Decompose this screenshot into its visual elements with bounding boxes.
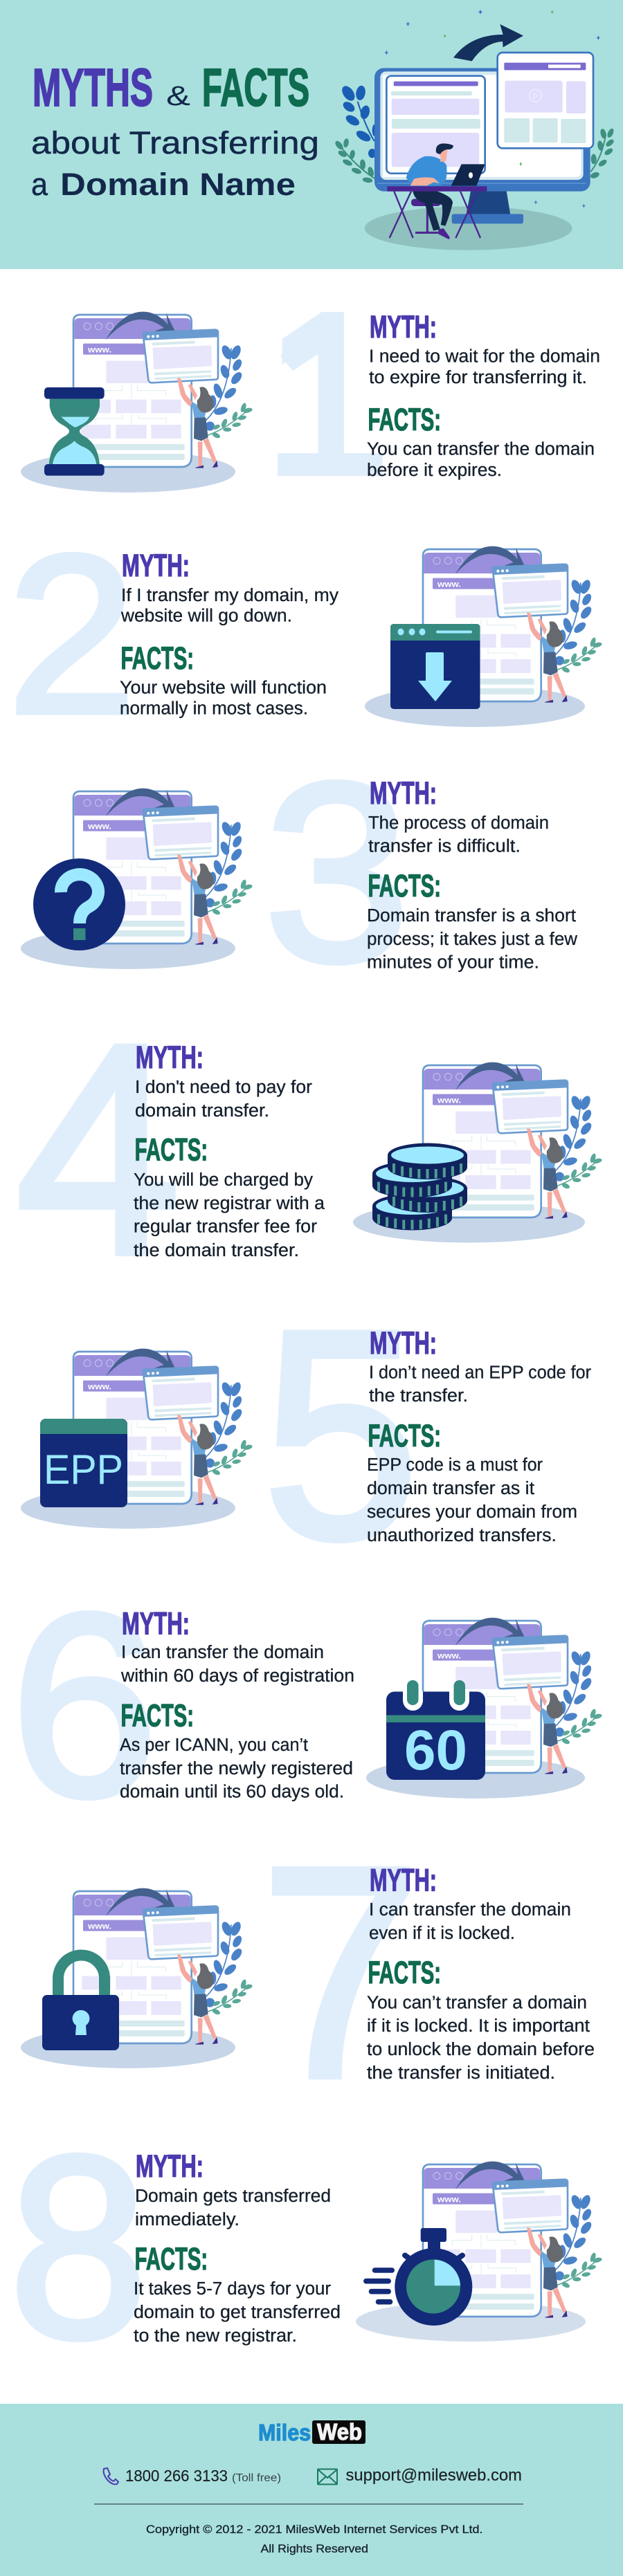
- myth text: the transfer.: [369, 1386, 468, 1406]
- panel: myth 7: [21, 1805, 595, 2140]
- illustration: browser transfer with EPP card: [21, 1349, 253, 1529]
- myth text: MYTH:: [136, 1040, 204, 1075]
- big number 2: 2: [7, 508, 136, 761]
- panel: myth 6: [10, 1560, 602, 1850]
- big number 8: 8: [9, 2101, 147, 2392]
- myth text: I don't need to pay for: [135, 1078, 313, 1097]
- illustration: browser transfer with calendar: www.: [437, 1652, 461, 1660]
- facts text: FACTS:: [368, 402, 441, 437]
- facts text: unauthorized transfers.: [367, 1526, 557, 1545]
- title: MYTHS: [33, 58, 153, 118]
- big number 3: 3: [264, 730, 410, 1015]
- myth text: MYTH:: [370, 775, 437, 811]
- myth text: [135, 1040, 313, 1121]
- illustration: browser transfer with download window: www.: [437, 581, 461, 589]
- facts text: to the new registrar.: [134, 2326, 297, 2346]
- facts text: transfer the newly registered: [120, 1759, 353, 1778]
- facts text: secures your domain from: [367, 1502, 577, 1522]
- panel: myth 3: [21, 730, 578, 1015]
- myth text: [369, 1862, 571, 1943]
- facts text: EPP code is a must for: [367, 1455, 543, 1475]
- myth text: [135, 2149, 331, 2229]
- header banner: [0, 0, 623, 269]
- illustration: browser transfer with download window: [365, 546, 602, 727]
- facts text: minutes of your time.: [367, 953, 539, 973]
- copyright: Copyright © 2012 - 2021 MilesWeb Internet Services Pvt Ltd.: [146, 2523, 483, 2536]
- illustration: browser transfer with padlock: [21, 1888, 253, 2068]
- facts text: As per ICANN, you can’t: [120, 1736, 308, 1755]
- myth text: I can transfer the domain: [369, 1900, 571, 1920]
- facts text: You can transfer the domain: [367, 440, 595, 459]
- panel: myth 1: [21, 265, 600, 522]
- illustration: browser transfer with EPP card: www.: [87, 1383, 111, 1392]
- title: a: [31, 167, 48, 202]
- illustration: browser transfer with stopwatch: www.: [437, 2196, 461, 2204]
- logo: MilesWeb: Miles: [258, 2420, 311, 2445]
- myth text: domain transfer.: [135, 1101, 269, 1121]
- phone number: [125, 2467, 281, 2485]
- facts text: FACTS:: [368, 1418, 441, 1453]
- panel: myth 4: [16, 983, 602, 1316]
- copyright: [146, 2523, 483, 2555]
- illustration: browser transfer with hourglass: www.: [87, 346, 111, 354]
- big number 6: 6: [10, 1560, 159, 1850]
- facts text: [120, 641, 327, 718]
- copyright: All Rights Reserved: [260, 2543, 368, 2555]
- icon: email: [318, 2469, 337, 2485]
- facts text: normally in most cases.: [120, 699, 308, 718]
- myth text: I don’t need an EPP code for: [369, 1363, 591, 1382]
- illustration: browser transfer with EPP card: EPP: [44, 1446, 123, 1493]
- title: [31, 58, 319, 202]
- logo: MilesWeb: [258, 2419, 365, 2445]
- logo: MilesWeb: Web: [317, 2419, 362, 2445]
- facts text: the domain transfer.: [134, 1241, 299, 1260]
- icon: phone: [104, 2468, 118, 2484]
- facts text: before it expires.: [367, 461, 502, 480]
- title: about Transferring: [31, 125, 319, 160]
- panel: myth 5: [21, 1270, 591, 1600]
- facts text: domain transfer as it: [367, 1479, 534, 1498]
- facts text: You can’t transfer a domain: [367, 1994, 587, 2013]
- facts text: to unlock the domain before: [367, 2040, 595, 2059]
- panel: myth 8: [9, 2101, 602, 2392]
- illustration: browser transfer with coins: www.: [437, 1097, 461, 1105]
- illustration: browser transfer with hourglass: [21, 312, 253, 493]
- big number 7: 7: [260, 1805, 421, 2140]
- illustration: browser transfer with question mark: www.: [87, 823, 111, 831]
- myth text: The process of domain: [368, 813, 549, 833]
- big number 4: 4: [16, 983, 181, 1316]
- big number 1: 1: [263, 265, 391, 522]
- phone number: 1800 266 3133: [125, 2467, 228, 2485]
- facts text: FACTS:: [120, 1698, 194, 1733]
- facts text: FACTS:: [368, 1955, 441, 1990]
- myth text: [120, 1606, 354, 1686]
- illustration: browser transfer with stopwatch: [356, 2162, 602, 2342]
- person at desk: [387, 143, 487, 239]
- myth text: [120, 548, 338, 625]
- myth text: MYTH:: [122, 1606, 190, 1641]
- myth text: MYTH:: [370, 1325, 437, 1361]
- facts text: [367, 402, 595, 480]
- facts text: FACTS:: [135, 1132, 208, 1168]
- email address: support@milesweb.com: [346, 2466, 522, 2485]
- title: Domain Name: [60, 167, 296, 202]
- myth text: within 60 days of registration: [120, 1666, 354, 1686]
- myth text: website will go down.: [120, 606, 292, 625]
- myth text: If I transfer my domain, my: [121, 586, 338, 605]
- illustration: browser transfer with calendar: 60: [404, 1719, 467, 1782]
- myth text: MYTH:: [370, 309, 437, 344]
- myth text: MYTH:: [370, 1862, 437, 1898]
- myth text: I need to wait for the domain: [369, 347, 600, 367]
- title: &: [166, 81, 190, 111]
- facts text: if it is locked. It is important: [367, 2016, 590, 2036]
- facts text: the transfer is initiated.: [367, 2063, 555, 2083]
- facts text: [134, 1132, 325, 1260]
- facts text: [367, 868, 578, 973]
- myth text: [368, 775, 549, 856]
- facts text: process; it takes just a few: [367, 930, 578, 949]
- panel: myth 2: [7, 508, 602, 761]
- facts text: Domain transfer is a short: [367, 906, 576, 926]
- myth text: to expire for transferring it.: [369, 368, 587, 387]
- myth text: MYTH:: [122, 548, 190, 583]
- facts text: the new registrar with a: [134, 1194, 325, 1213]
- facts text: [120, 1698, 353, 1801]
- myth text: [369, 1325, 591, 1406]
- myth text: transfer is difficult.: [368, 837, 521, 856]
- facts text: regular transfer fee for: [134, 1217, 318, 1237]
- facts text: [134, 2241, 341, 2346]
- illustration: browser transfer with question mark: [21, 789, 253, 969]
- illustration: browser transfer with calendar: [366, 1618, 602, 1798]
- facts text: [367, 1955, 595, 2083]
- illustration: browser transfer with padlock: www.: [87, 1923, 111, 1931]
- myth text: [369, 309, 600, 387]
- title: FACTS: [202, 58, 309, 118]
- myth text: even if it is locked.: [369, 1924, 515, 1943]
- facts text: domain to get transferred: [134, 2303, 341, 2322]
- facts text: FACTS:: [120, 641, 194, 676]
- facts text: FACTS:: [135, 2241, 208, 2276]
- facts text: Your website will function: [120, 678, 327, 697]
- facts text: FACTS:: [368, 868, 441, 903]
- icon: transfer arrow: [453, 24, 523, 61]
- hero illustration: person at monitor: [334, 9, 615, 250]
- illustration: browser transfer with coins: [353, 1062, 602, 1242]
- myth text: Domain gets transferred: [135, 2187, 331, 2206]
- facts text: It takes 5-7 days for your: [134, 2279, 332, 2299]
- myth text: MYTH:: [136, 2149, 204, 2184]
- facts text: [367, 1418, 577, 1545]
- facts text: domain until its 60 days old.: [120, 1782, 344, 1801]
- big number 5: 5: [263, 1270, 419, 1600]
- footer: [0, 2404, 623, 2576]
- phone number: (Toll free): [232, 2472, 281, 2484]
- myth text: immediately.: [135, 2210, 240, 2229]
- myth text: I can transfer the domain: [121, 1643, 324, 1662]
- facts text: You will be charged by: [134, 1170, 313, 1190]
